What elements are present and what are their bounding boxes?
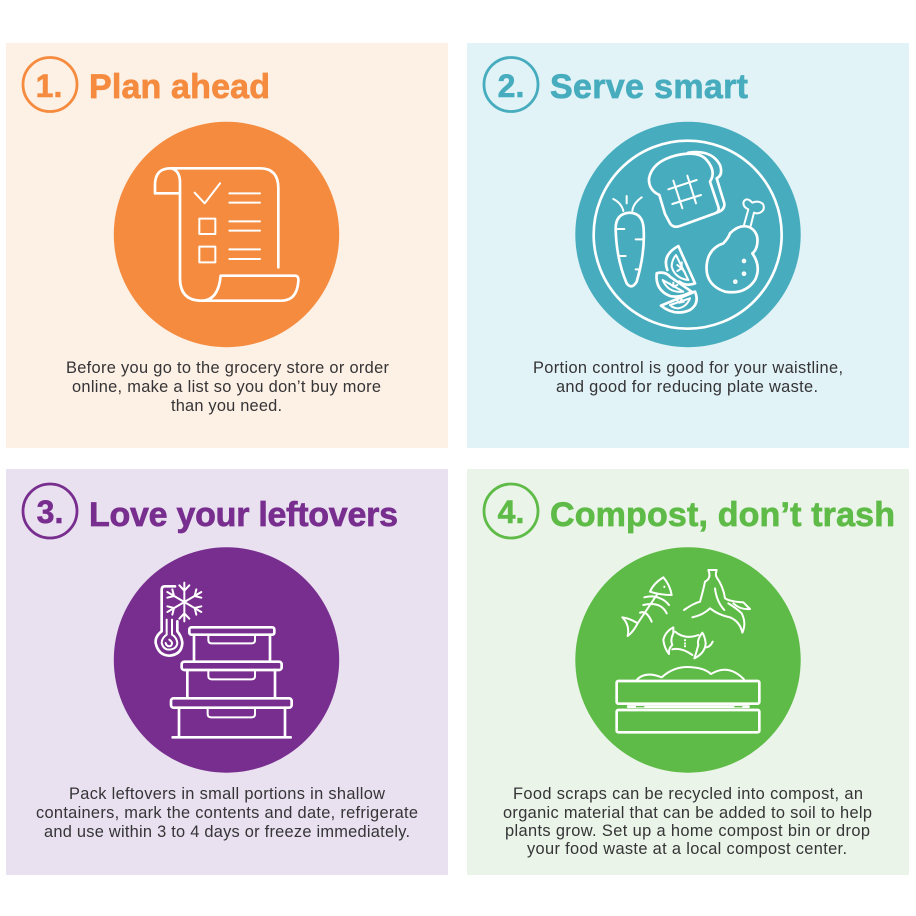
heading: love your leftovers: Love your leftovers	[89, 496, 398, 534]
text: plan ahead description: online, make a list so you don’t buy more	[72, 378, 381, 396]
heading: serve smart: Serve smart	[550, 68, 748, 106]
icon: checklist scroll on orange circle	[114, 122, 339, 347]
text: leftovers description: and use within 3 to 4 days or freeze immediately.	[44, 823, 410, 841]
text: compost description	[503, 785, 872, 858]
icon: plate with food on teal circle	[575, 122, 801, 347]
text: serve smart description: and good for reducing plate waste.	[556, 378, 818, 396]
panel: plan ahead	[6, 43, 448, 448]
panel: compost, don't trash	[467, 469, 909, 875]
text: serve smart description	[533, 359, 843, 396]
text: serve smart description: Portion control is good for your waistline,	[533, 359, 843, 377]
number badge 2: 2.	[498, 68, 524, 104]
number badge 1	[23, 58, 77, 112]
number badge 3: 3.	[37, 494, 63, 530]
text: leftovers description	[36, 785, 418, 841]
text: leftovers description: Pack leftovers in small portions in shallow	[69, 785, 385, 803]
text: leftovers description: containers, mark the contents and date, refrigerate	[36, 804, 418, 822]
number badge 4: 4.	[498, 494, 524, 530]
icon: food containers and thermometer on purple circle	[114, 547, 339, 773]
text: plan ahead description	[66, 359, 390, 415]
number badge 3	[23, 484, 77, 538]
panel: serve smart	[467, 43, 909, 448]
icon: compost bin with food scraps on green circle	[575, 547, 801, 773]
number badge 1: 1.	[36, 68, 62, 104]
text: plan ahead description: than you need.	[171, 397, 282, 415]
heading: compost, don't trash: Compost, don’t trash	[550, 496, 895, 534]
text: compost description: organic material that can be added to soil to help	[503, 804, 872, 822]
number badge 4	[484, 484, 538, 538]
text: compost description: your food waste at a local compost center.	[527, 840, 847, 858]
heading: plan ahead: Plan ahead	[89, 68, 270, 106]
number badge 2	[484, 58, 538, 112]
panel: love your leftovers	[6, 469, 448, 875]
text: compost description: plants grow. Set up a home compost bin or drop	[505, 822, 870, 840]
text: plan ahead description: Before you go to the grocery store or order	[66, 359, 390, 377]
text: compost description: Food scraps can be recycled into compost, an	[513, 785, 863, 803]
